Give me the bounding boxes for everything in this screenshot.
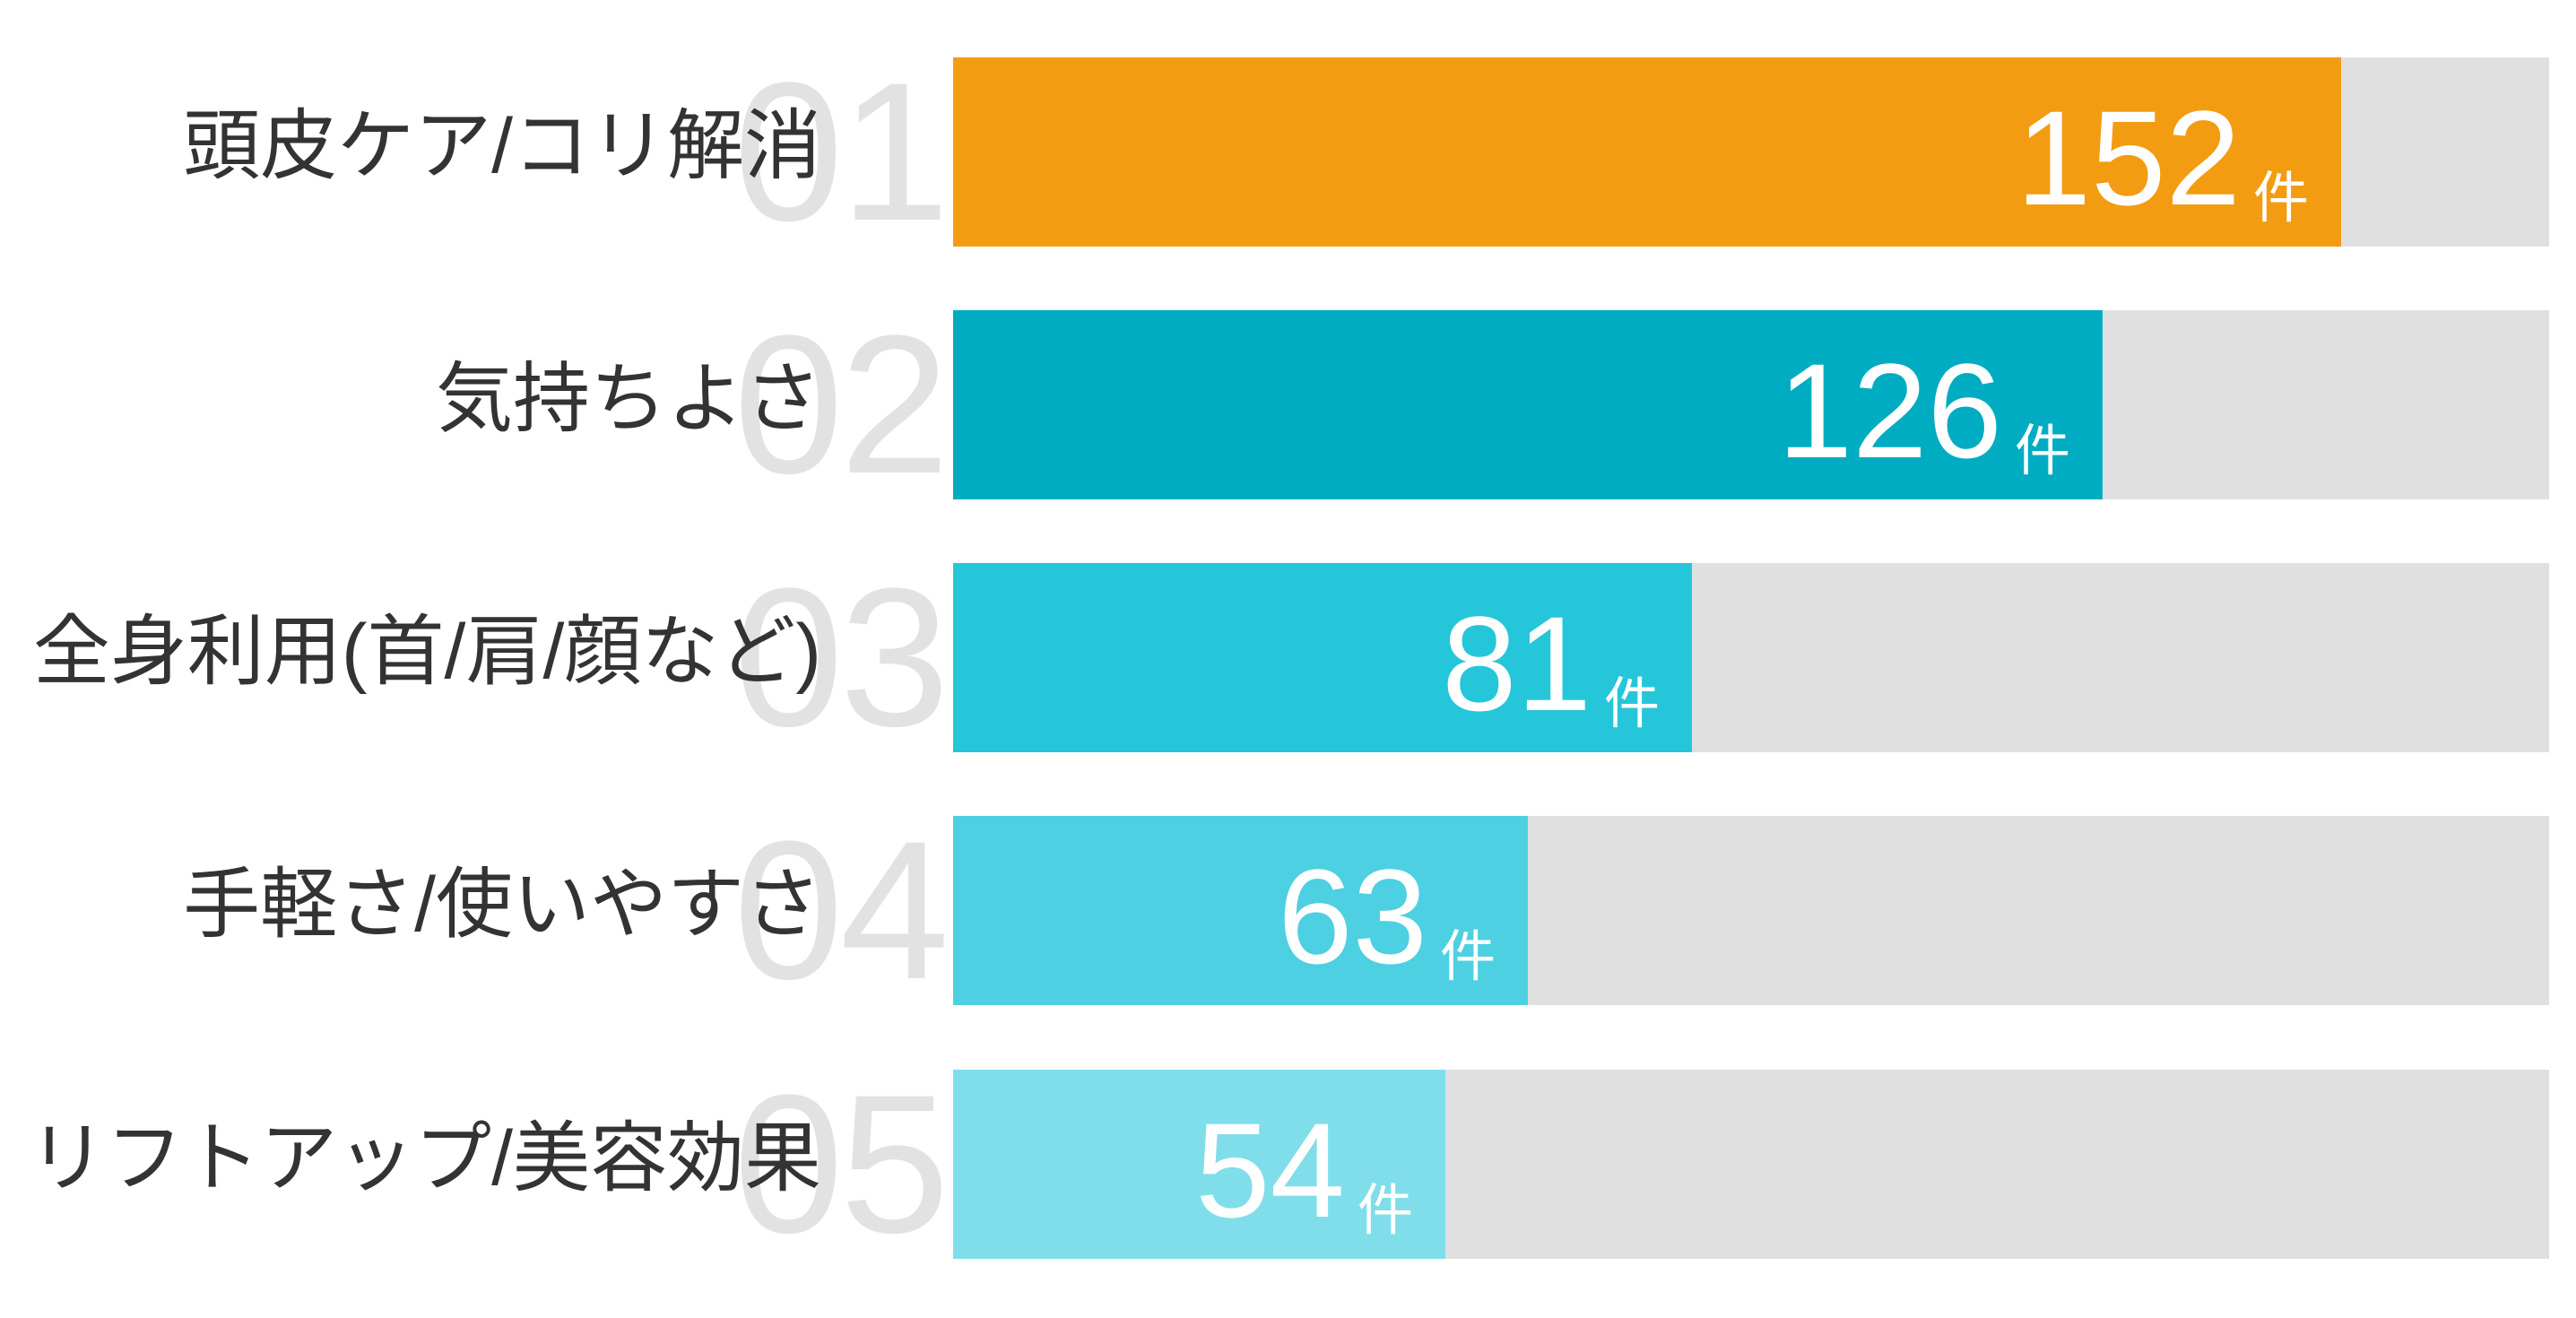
bar 5: 件 [1357, 1180, 1413, 1242]
row 4: ease of use [183, 800, 2549, 1020]
bar 1 [953, 57, 2341, 247]
track 1 [953, 57, 2549, 247]
row 5: lift up [29, 1054, 2549, 1274]
track 3 [953, 563, 2549, 752]
label 1: 頭皮ケア/コリ解消 [183, 103, 821, 189]
track 2 [953, 310, 2549, 499]
bar 1: 件 [2253, 168, 2309, 230]
rank number 04: 04 [733, 800, 946, 1020]
label 5: リフトアップ/美容効果 [29, 1115, 821, 1201]
row 2: comfort [436, 294, 2549, 515]
track 5 [953, 1070, 2549, 1259]
bar 2 [953, 310, 2103, 499]
rank number 01: 01 [733, 41, 946, 262]
bar 3 [953, 563, 1692, 752]
bar 1: 152 [2017, 82, 2241, 233]
rank number 03: 03 [733, 547, 946, 767]
row 1: scalp care [183, 41, 2549, 262]
bar 5: 54 [1195, 1095, 1345, 1245]
label 3: 全身利用(首/肩/顔など) [33, 609, 821, 695]
bar 2: 件 [2015, 421, 2070, 482]
row 3: whole body [33, 547, 2549, 767]
bar 4: 件 [1440, 926, 1496, 988]
bar 2: 126 [1778, 335, 2002, 486]
rank number 05: 05 [733, 1054, 946, 1274]
label 2: 気持ちよさ [436, 356, 821, 442]
label 4: 手軽さ/使いやすさ [183, 862, 821, 948]
bar 4 [953, 816, 1528, 1005]
rank number 02: 02 [733, 294, 946, 515]
track 4 [953, 816, 2549, 1005]
bar 3: 81 [1442, 588, 1592, 739]
bar 3: 件 [1604, 673, 1660, 735]
bar 5 [953, 1070, 1445, 1259]
bar 4: 63 [1278, 841, 1427, 992]
